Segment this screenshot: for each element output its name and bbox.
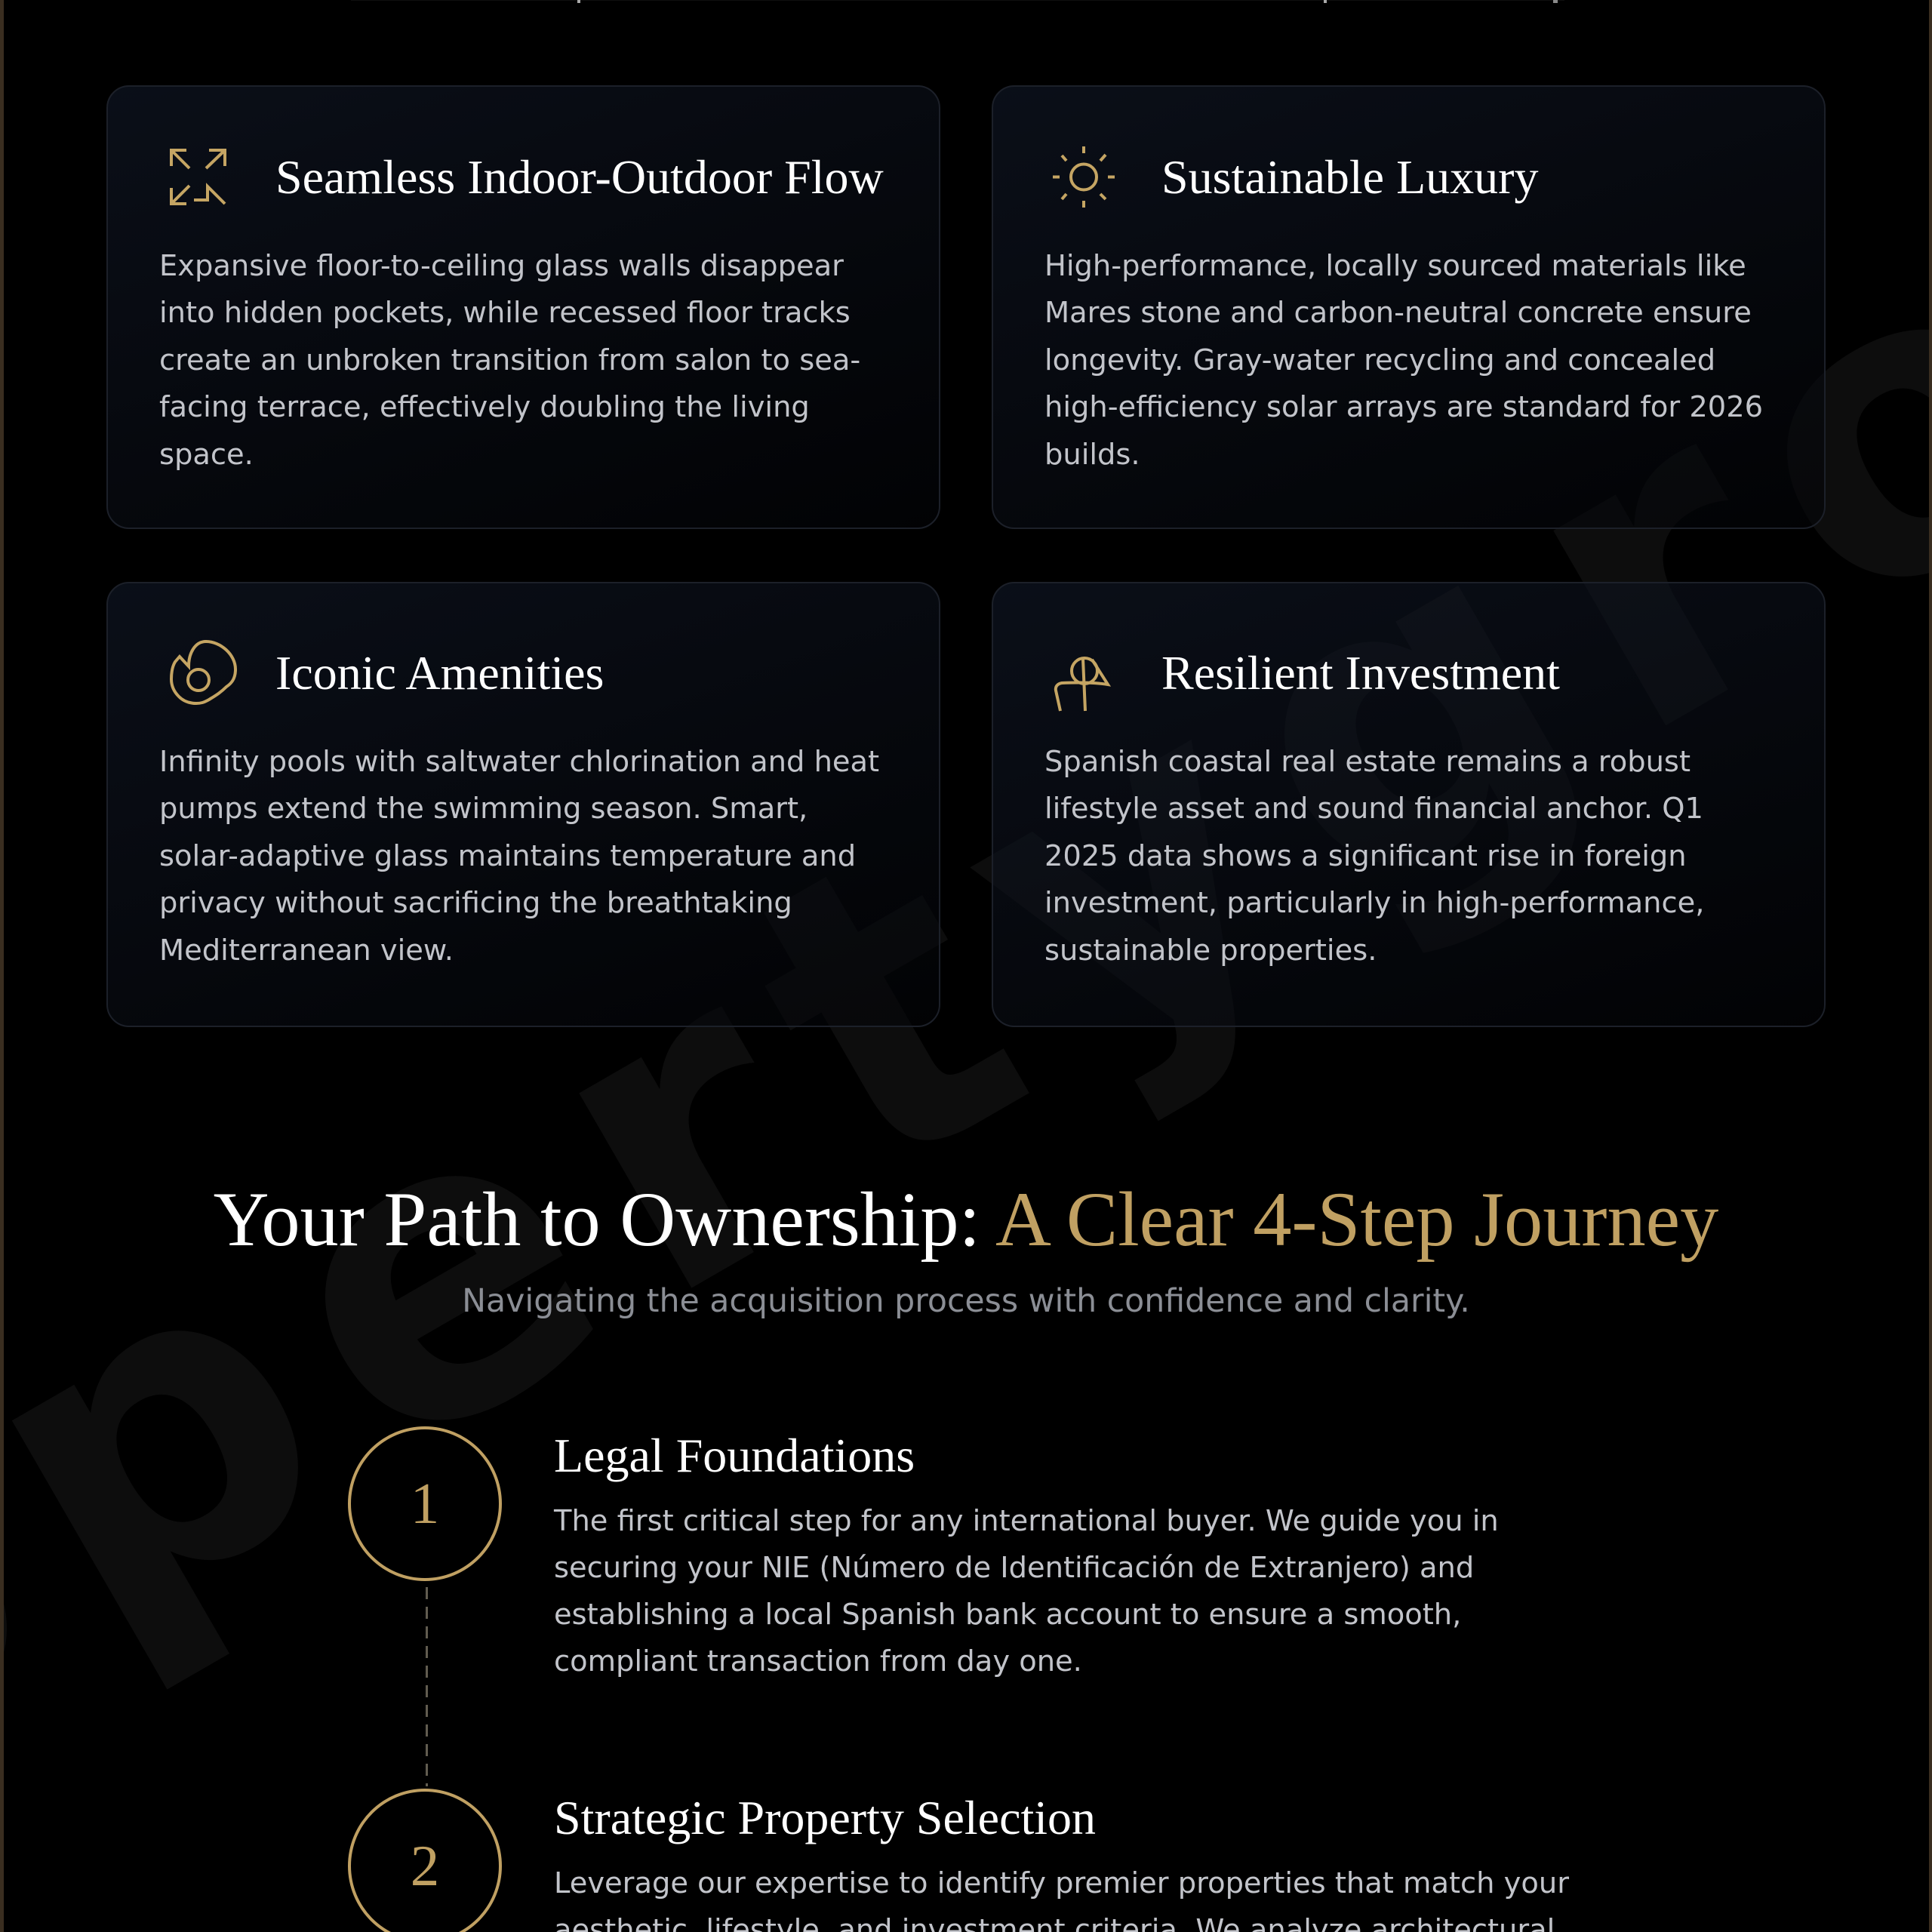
body text: longevity. Gray-water recycling and concealed (1044, 343, 1715, 377)
body text: into hidden pockets, while recessed floor tracks (159, 296, 851, 330)
body text: Mediterranean view. (159, 934, 454, 968)
body text (159, 249, 860, 472)
body text: builds. (1044, 438, 1140, 472)
heading: Seamless Indoor-Outdoor Flow (275, 150, 884, 204)
body text: create an unbroken transition from salon to sea- (159, 343, 860, 377)
body text: Mares stone and carbon-neutral concrete ensure (1044, 296, 1752, 330)
section heading: Your Path to Ownership: A Clear 4-Step Journey (214, 1177, 1718, 1263)
step 2 (348, 1789, 1570, 1932)
panel: resilient investment (992, 582, 1826, 1027)
body text: Infinity pools with saltwater chlorination and heat (159, 745, 879, 779)
step text (554, 1866, 1570, 1932)
body text: facing terrace, effectively doubling the living (159, 390, 810, 424)
heading: Sustainable Luxury (1161, 150, 1538, 204)
left edge strip (0, 0, 4, 1932)
step text: The first critical step for any international buyer. We guide you in (554, 1504, 1499, 1538)
body text: space. (159, 438, 254, 472)
step title: Strategic Property Selection (554, 1791, 1096, 1844)
step text: Leverage our expertise to identify premier properties that match your (554, 1866, 1569, 1900)
body text (1044, 249, 1763, 472)
heading: Resilient Investment (1161, 646, 1560, 700)
step number: 2 (411, 1833, 439, 1898)
body text (1044, 745, 1704, 968)
body text: High-performance, locally sourced materials like (1044, 249, 1746, 283)
right edge strip (1929, 0, 1932, 1932)
clipped intro text remnants (351, 0, 1564, 3)
step text (554, 1504, 1499, 1678)
body text: high-efficiency solar arrays are standard for 2026 (1044, 390, 1763, 424)
body text: Expansive floor-to-ceiling glass walls disappear (159, 249, 844, 283)
connector line (426, 1587, 428, 1786)
body text: Spanish coastal real estate remains a robust (1044, 745, 1690, 779)
step number (348, 1789, 502, 1932)
step text: securing your NIE (Número de Identificación de Extranjero) and (554, 1551, 1474, 1585)
step title: Legal Foundations (554, 1429, 915, 1482)
body text: investment, particularly in high-performance, (1044, 886, 1704, 920)
body text: pumps extend the swimming season. Smart, (159, 792, 808, 826)
step text: compliant transaction from day one. (554, 1644, 1082, 1678)
panel: seamless indoor-outdoor flow (106, 85, 940, 529)
step number (348, 1426, 502, 1581)
body text: sustainable properties. (1044, 934, 1377, 968)
body text: privacy without sacrificing the breathtaking (159, 886, 792, 920)
section subheading: Navigating the acquisition process with confidence and clarity. (462, 1282, 1470, 1320)
panel: iconic amenities (106, 582, 940, 1027)
step text: establishing a local Spanish bank account to ensure a smooth, (554, 1598, 1461, 1632)
step number: 1 (411, 1471, 439, 1536)
panel: sustainable luxury (992, 85, 1826, 529)
body text: solar-adaptive glass maintains temperature and (159, 839, 856, 873)
body text: lifestyle asset and sound financial anchor. Q1 (1044, 792, 1703, 826)
heading: Iconic Amenities (275, 646, 604, 700)
step 1 (348, 1426, 1499, 1678)
body text: 2025 data shows a significant rise in foreign (1044, 839, 1687, 873)
body text (159, 745, 879, 968)
